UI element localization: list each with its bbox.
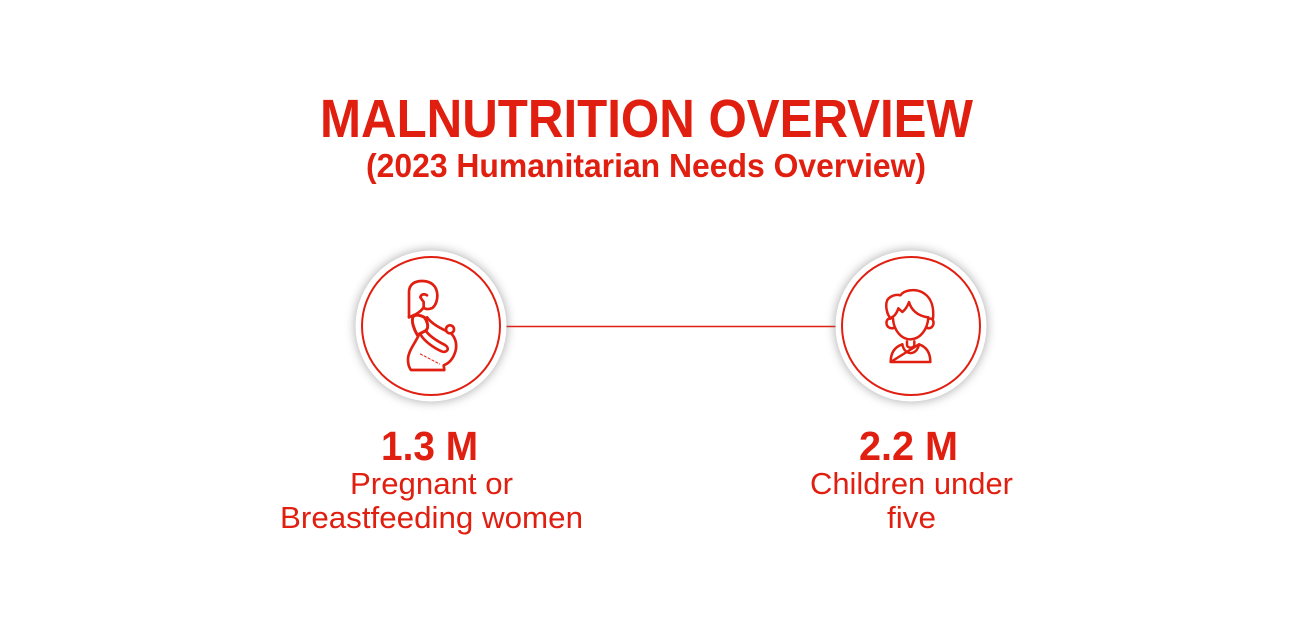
stat: 2.2 M: 2.2 M xyxy=(859,423,958,469)
label: pregnant or breastfeeding women xyxy=(280,466,583,535)
connector line xyxy=(506,326,836,328)
label: children under five: Children under xyxy=(810,466,1013,501)
title: MALNUTRITION OVERVIEW xyxy=(320,89,973,149)
stat: 1.3 M: 1.3 M xyxy=(381,423,478,469)
label: children under five xyxy=(810,466,1013,535)
label: children under five: five xyxy=(887,500,936,535)
icon: child xyxy=(835,250,987,402)
subtitle: (2023 Humanitarian Needs Overview) xyxy=(366,147,926,184)
label: pregnant or breastfeeding women: Pregnant or xyxy=(350,466,513,501)
icon: pregnant woman xyxy=(355,250,507,402)
label: pregnant or breastfeeding women: Breastfeeding women xyxy=(280,500,583,535)
